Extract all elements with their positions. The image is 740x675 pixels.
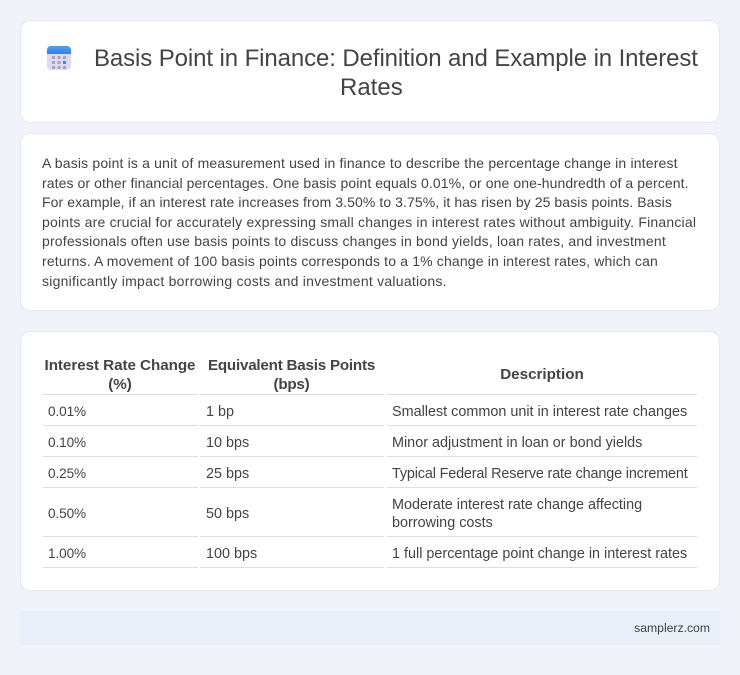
paragraph: returns. A movement of 100 basis points corresponds to a 1% change in interest rates, which can — [42, 253, 658, 269]
paragraph: significantly impact borrowing costs and investment valuations. — [42, 273, 447, 289]
table row: 0.25% — [43, 466, 697, 488]
title — [94, 45, 698, 101]
paragraph: A basis point is a unit of measurement used in finance to describe the percentage change in interest — [42, 155, 678, 171]
icon: calendar grid — [47, 46, 71, 70]
table row: 0.10%: 10 bps — [206, 435, 249, 451]
table row: 0.50%: Moderate interest rate change affecting — [392, 497, 642, 513]
table row: 1.00% — [43, 546, 697, 568]
table row: 1.00%: 1.00% — [48, 546, 86, 561]
title: Rates — [340, 74, 403, 101]
title: Basis Point in Finance: Definition and Example in Interest — [94, 45, 698, 72]
table row: 0.01% — [43, 404, 697, 426]
table row: 0.10%: 0.10% — [48, 435, 86, 450]
table header: Interest Rate Change — [45, 357, 195, 374]
table row: 1.00%: 1 full percentage point change in interest rates — [392, 546, 687, 562]
table header: Description — [500, 366, 584, 383]
paragraph: points are crucial for accurately expressing small changes in interest rates without ambiguity. Financial — [42, 214, 696, 230]
paragraph: For example, if an interest rate increases from 3.50% to 3.75%, it has risen by 25 basis points. Basis — [42, 194, 672, 210]
table row: 0.10% — [43, 435, 697, 457]
table row: 0.50%: borrowing costs — [392, 515, 493, 531]
table header — [43, 357, 697, 395]
table row: 0.01%: 0.01% — [48, 404, 86, 419]
table row: 0.50%: 50 bps — [206, 506, 249, 522]
footer bar — [20, 611, 720, 645]
panel: title header — [20, 20, 720, 123]
table row: 0.25%: Typical Federal Reserve rate change increment — [392, 466, 688, 482]
table row: 0.10%: Minor adjustment in loan or bond yields — [392, 435, 642, 451]
table row: 0.25%: 25 bps — [206, 466, 249, 482]
paragraph: rates or other financial percentages. One basis point equals 0.01%, or one one-hundredth of a percent. — [42, 175, 689, 191]
table header: Equivalent Basis Points — [208, 357, 375, 374]
table row: 0.50% — [43, 497, 697, 537]
paragraph: professionals often use basis points to discuss changes in bond yields, loan rates, and investment — [42, 233, 666, 249]
panel: basis point table — [20, 331, 720, 591]
paragraph — [42, 155, 696, 289]
table row: 0.25%: 0.25% — [48, 466, 86, 481]
table row: 0.01%: Smallest common unit in interest rate changes — [392, 404, 687, 420]
panel: definition text — [20, 133, 720, 311]
table row: 0.01%: 1 bp — [206, 404, 234, 420]
footer source text: samplerz.com — [634, 621, 710, 635]
table header: (%) — [108, 376, 132, 392]
table row: 1.00%: 100 bps — [206, 546, 257, 562]
table row: 0.50%: 0.50% — [48, 506, 86, 521]
table header: (bps) — [273, 376, 310, 392]
